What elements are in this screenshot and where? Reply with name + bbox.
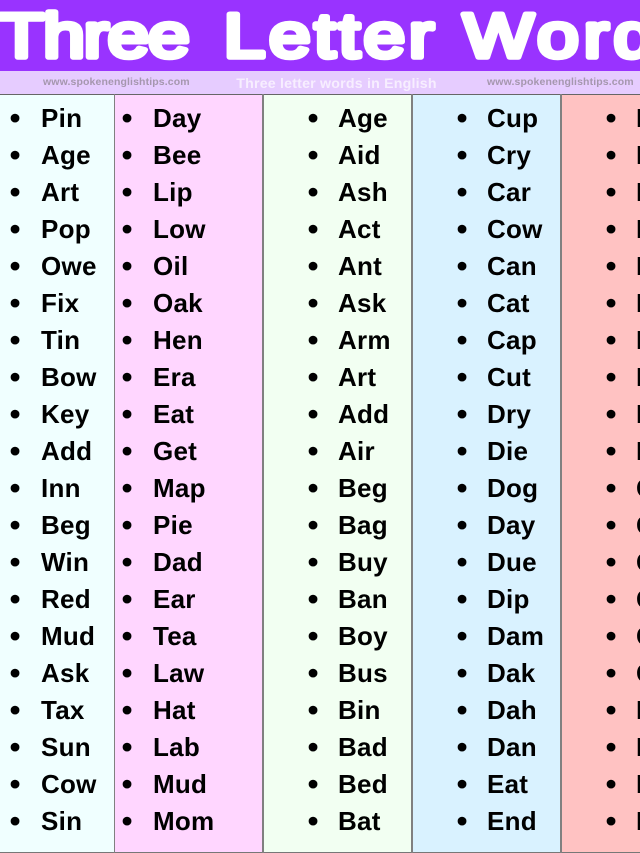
- column 3: green word list: •: [308, 729, 318, 764]
- column 2: pink word list: •: [122, 137, 132, 172]
- column 2: pink word list: •: [122, 211, 132, 246]
- column 2: pink word list: •: [122, 396, 132, 431]
- column 3: green word list: •: [308, 433, 318, 468]
- title: Three: [0, 1, 190, 71]
- column 1: cyan word list: •: [10, 655, 20, 690]
- column 2: pink word list: Dad: [153, 547, 203, 577]
- column 1: cyan word list: •: [10, 729, 20, 764]
- column 1: cyan word list: Bow: [41, 362, 97, 392]
- column 1: cyan word list: Ask: [41, 658, 89, 688]
- column 2: pink word list: •: [122, 729, 132, 764]
- column 3: green word list: Bad: [338, 732, 388, 762]
- column 3: green word list: Air: [338, 436, 375, 466]
- column 4: blue word list: •: [457, 322, 467, 357]
- column 1: cyan word list: Beg: [41, 510, 91, 540]
- column 2: pink word list: •: [122, 581, 132, 616]
- column 3: green word list: Ash: [338, 177, 388, 207]
- column 3: green word list: •: [308, 285, 318, 320]
- column 3: green word list: Ant: [338, 251, 382, 281]
- column 4: blue word list: Cup: [487, 103, 538, 133]
- column 4: blue word list: •: [457, 618, 467, 653]
- column 5: red word list, clipped at page edge: •: [606, 322, 616, 357]
- column 1: cyan word list: •: [10, 396, 20, 431]
- column 3: green word list: •: [308, 618, 318, 653]
- title: [0, 1, 640, 71]
- column 2: pink word list: Day: [153, 103, 201, 133]
- website url left: www.spokenenglishtips.com: [43, 76, 190, 88]
- column 3: green word list: •: [308, 174, 318, 209]
- column 1: cyan word list: Pop: [41, 214, 91, 244]
- subtitle: Three letter words in English: [236, 76, 437, 92]
- column 1: cyan word list: Tin: [41, 325, 80, 355]
- column 2: pink word list: Bee: [153, 140, 201, 170]
- column 3: green word list: •: [308, 544, 318, 579]
- column 4: blue word list: •: [457, 248, 467, 283]
- column 3: green word list: Bin: [338, 695, 381, 725]
- column 4: blue word list: Day: [487, 510, 535, 540]
- column 2: pink word list: •: [122, 692, 132, 727]
- column 4: blue word list: Cap: [487, 325, 537, 355]
- column 1: cyan word list: Win: [41, 547, 89, 577]
- column 4: blue word list: •: [457, 285, 467, 320]
- column 3: green word list: Art: [338, 362, 376, 392]
- column 1: cyan word list: •: [10, 507, 20, 542]
- column 5: red word list, clipped at page edge: •: [606, 174, 616, 209]
- column 4: blue word list: •: [457, 100, 467, 135]
- column 2: pink word list: Law: [153, 658, 204, 688]
- column 1: cyan word list: •: [10, 137, 20, 172]
- column 1: cyan word list: Add: [41, 436, 92, 466]
- column 3: green word list: Ask: [338, 288, 386, 318]
- column 1: cyan word list: •: [10, 766, 20, 801]
- column 1: cyan word list: •: [10, 618, 20, 653]
- column 5: red word list, clipped at page edge: •: [606, 211, 616, 246]
- column 1: cyan word list: Art: [41, 177, 79, 207]
- column 3: green word list: •: [308, 803, 318, 838]
- column 4: blue word list: •: [457, 581, 467, 616]
- column 3: green word list: Boy: [338, 621, 388, 651]
- column 2: pink word list: Hen: [153, 325, 203, 355]
- column 2: pink word list: •: [122, 322, 132, 357]
- column 1: cyan word list: Pin: [41, 103, 82, 133]
- column 4: blue word list: Dam: [487, 621, 544, 651]
- column 5: red word list, clipped at page edge: •: [606, 692, 616, 727]
- column 4: blue word list: Cow: [487, 214, 543, 244]
- column 1: cyan word list: [0, 94, 114, 853]
- column 5: red word list, clipped at page edge: •: [606, 359, 616, 394]
- column 1: cyan word list: •: [10, 211, 20, 246]
- column 1: cyan word list: •: [10, 433, 20, 468]
- column 4: blue word list: •: [457, 507, 467, 542]
- column 2: pink word list: •: [122, 100, 132, 135]
- column 2: pink word list: Pie: [153, 510, 193, 540]
- column 2: pink word list: •: [122, 433, 132, 468]
- column 1: cyan word list: Fix: [41, 288, 79, 318]
- column 4: blue word list: Cat: [487, 288, 530, 318]
- column 4: blue word list: [412, 94, 561, 853]
- column 3: green word list: Age: [338, 103, 388, 133]
- column 2: pink word list: •: [122, 174, 132, 209]
- title: Letter: [224, 1, 434, 71]
- column 4: blue word list: Dip: [487, 584, 530, 614]
- column 4: blue word list: •: [457, 433, 467, 468]
- column 1: cyan word list: •: [10, 803, 20, 838]
- column 1: cyan word list: Age: [41, 140, 91, 170]
- column 3: green word list: •: [308, 581, 318, 616]
- column 4: blue word list: •: [457, 544, 467, 579]
- column 1: cyan word list: •: [10, 322, 20, 357]
- column 2: pink word list: •: [122, 285, 132, 320]
- column 4: blue word list: Car: [487, 177, 531, 207]
- column 2: pink word list: Hat: [153, 695, 196, 725]
- column 4: blue word list: Eat: [487, 769, 528, 799]
- column 2: pink word list: Mud: [153, 769, 207, 799]
- column 2: pink word list: Map: [153, 473, 206, 503]
- column 5: red word list, clipped at page edge: •: [606, 248, 616, 283]
- column 4: blue word list: Die: [487, 436, 528, 466]
- column 3: green word list: Bus: [338, 658, 388, 688]
- column 1: cyan word list: •: [10, 692, 20, 727]
- title banner: [0, 0, 640, 71]
- column 5: red word list, clipped at page edge: •: [606, 433, 616, 468]
- column 3: green word list: Bag: [338, 510, 388, 540]
- column 4: blue word list: •: [457, 766, 467, 801]
- column 5: red word list, clipped at page edge: •: [606, 618, 616, 653]
- column 1: cyan word list: •: [10, 285, 20, 320]
- column 1: cyan word list: •: [10, 581, 20, 616]
- column 2: pink word list: Era: [153, 362, 196, 392]
- column 2: pink word list: Tea: [153, 621, 197, 651]
- column 5: red word list, clipped at page edge: •: [606, 544, 616, 579]
- column 4: blue word list: •: [457, 655, 467, 690]
- column 3: green word list: Aid: [338, 140, 381, 170]
- column 4: blue word list: •: [457, 729, 467, 764]
- column 5: red word list, clipped at page edge: •: [606, 655, 616, 690]
- column 1: cyan word list: Cow: [41, 769, 97, 799]
- column 5: red word list, clipped at page edge: [561, 94, 640, 853]
- column 1: cyan word list: •: [10, 544, 20, 579]
- column 2: pink word list: Mom: [153, 806, 214, 836]
- column 3: green word list: [263, 94, 412, 853]
- column 1: cyan word list: Owe: [41, 251, 97, 281]
- column 4: blue word list: •: [457, 359, 467, 394]
- column 4: blue word list: Due: [487, 547, 537, 577]
- column 5: red word list, clipped at page edge: •: [606, 285, 616, 320]
- column 4: blue word list: •: [457, 174, 467, 209]
- column 2: pink word list: [114, 94, 263, 853]
- column 4: blue word list: Dry: [487, 399, 531, 429]
- column 5: red word list, clipped at page edge: •: [606, 396, 616, 431]
- column 1: cyan word list: Tax: [41, 695, 85, 725]
- column 4: blue word list: •: [457, 470, 467, 505]
- column 2: pink word list: •: [122, 544, 132, 579]
- column 2: pink word list: Oil: [153, 251, 188, 281]
- column 1: cyan word list: •: [10, 359, 20, 394]
- column 2: pink word list: •: [122, 248, 132, 283]
- column 3: green word list: •: [308, 655, 318, 690]
- column 3: green word list: Ban: [338, 584, 388, 614]
- column 1: cyan word list: Sin: [41, 806, 82, 836]
- column 4: blue word list: Dak: [487, 658, 535, 688]
- column 2: pink word list: Lip: [153, 177, 193, 207]
- column 1: cyan word list: •: [10, 174, 20, 209]
- column 4: blue word list: Dog: [487, 473, 538, 503]
- column 1: cyan word list: •: [10, 470, 20, 505]
- column 2: pink word list: •: [122, 470, 132, 505]
- column 5: red word list, clipped at page edge: •: [606, 137, 616, 172]
- column 3: green word list: •: [308, 211, 318, 246]
- column 2: pink word list: Oak: [153, 288, 203, 318]
- column 5: red word list, clipped at page edge: •: [606, 581, 616, 616]
- column 2: pink word list: Ear: [153, 584, 196, 614]
- column 2: pink word list: •: [122, 803, 132, 838]
- column 1: cyan word list: •: [10, 248, 20, 283]
- column 2: pink word list: Eat: [153, 399, 194, 429]
- column 3: green word list: Buy: [338, 547, 388, 577]
- column 2: pink word list: Low: [153, 214, 206, 244]
- column 4: blue word list: •: [457, 137, 467, 172]
- column 1: cyan word list: Mud: [41, 621, 95, 651]
- column 2: pink word list: •: [122, 655, 132, 690]
- column 3: green word list: Beg: [338, 473, 388, 503]
- website url right: www.spokenenglishtips.com: [487, 76, 634, 88]
- column 4: blue word list: Cry: [487, 140, 531, 170]
- column 4: blue word list: Can: [487, 251, 537, 281]
- column 1: cyan word list: Red: [41, 584, 91, 614]
- column 4: blue word list: Cut: [487, 362, 531, 392]
- column 3: green word list: •: [308, 359, 318, 394]
- column 2: pink word list: Get: [153, 436, 197, 466]
- column 2: pink word list: Lab: [153, 732, 200, 762]
- column 5: red word list, clipped at page edge: •: [606, 470, 616, 505]
- column 1: cyan word list: Key: [41, 399, 89, 429]
- column 3: green word list: •: [308, 396, 318, 431]
- column 5: red word list, clipped at page edge: •: [606, 803, 616, 838]
- column 4: blue word list: •: [457, 803, 467, 838]
- column 2: pink word list: •: [122, 766, 132, 801]
- column 3: green word list: Bed: [338, 769, 388, 799]
- column 3: green word list: •: [308, 137, 318, 172]
- column 3: green word list: •: [308, 766, 318, 801]
- column 3: green word list: •: [308, 248, 318, 283]
- column 1: cyan word list: •: [10, 100, 20, 135]
- column 5: red word list, clipped at page edge: •: [606, 729, 616, 764]
- column 4: blue word list: Dan: [487, 732, 537, 762]
- column 4: blue word list: •: [457, 396, 467, 431]
- column 3: green word list: Add: [338, 399, 389, 429]
- column 4: blue word list: End: [487, 806, 537, 836]
- column 5: red word list, clipped at page edge: •: [606, 507, 616, 542]
- column 4: blue word list: •: [457, 211, 467, 246]
- column 2: pink word list: •: [122, 359, 132, 394]
- column 3: green word list: •: [308, 322, 318, 357]
- column 3: green word list: Bat: [338, 806, 381, 836]
- subtitle bar: [0, 71, 640, 94]
- column 3: green word list: Arm: [338, 325, 391, 355]
- column 5: red word list, clipped at page edge: •: [606, 766, 616, 801]
- column 1: cyan word list: Sun: [41, 732, 91, 762]
- column 2: pink word list: •: [122, 507, 132, 542]
- column 1: cyan word list: Inn: [41, 473, 81, 503]
- column 3: green word list: •: [308, 470, 318, 505]
- column 5: red word list, clipped at page edge: •: [606, 100, 616, 135]
- column 2: pink word list: •: [122, 618, 132, 653]
- column 3: green word list: •: [308, 100, 318, 135]
- column 4: blue word list: •: [457, 692, 467, 727]
- column 3: green word list: •: [308, 507, 318, 542]
- column 3: green word list: •: [308, 692, 318, 727]
- column 4: blue word list: Dah: [487, 695, 537, 725]
- column 3: green word list: Act: [338, 214, 381, 244]
